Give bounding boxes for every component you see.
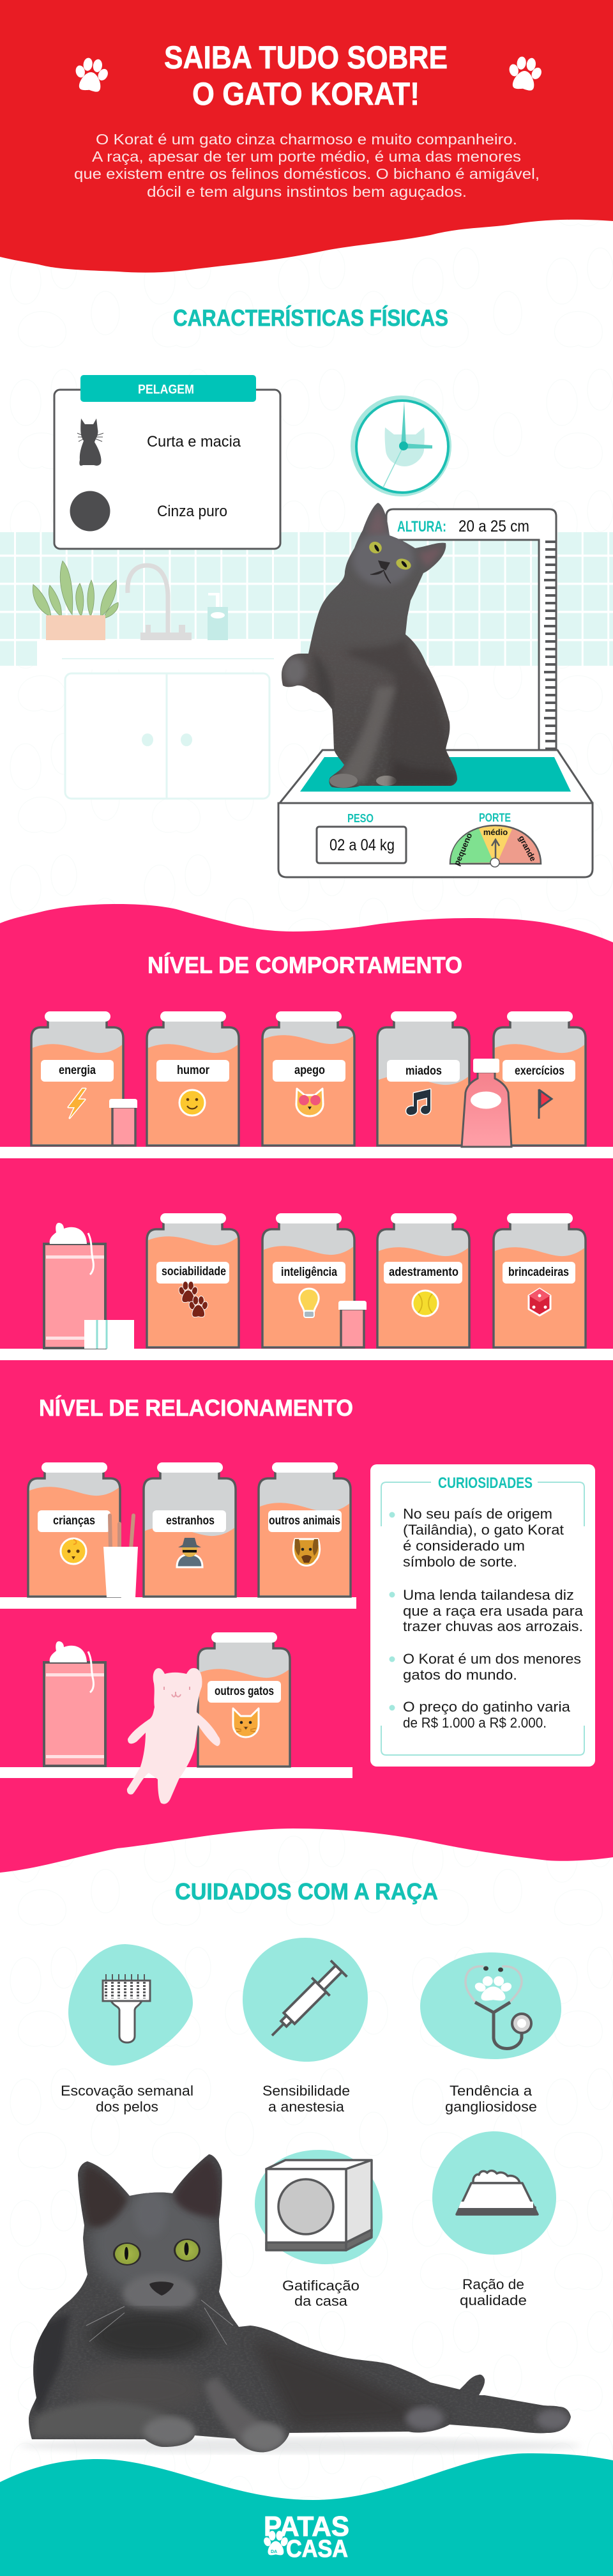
tall pink glass 2 [44,1641,105,1766]
jar: inteligência [261,1213,356,1349]
tab: pelagem [80,375,256,402]
jar: estranhos [142,1462,237,1598]
label [503,1262,575,1284]
care: gatificação [255,2150,382,2309]
text: cinza puro: Cinza puro [157,503,227,520]
peso value box: 02 a 04 kg [329,836,395,854]
soap bottle [208,593,228,640]
porte label: PORTE [479,811,511,824]
ear inner right [419,547,441,566]
nose and mouth [370,561,391,583]
intro text: dócil e tem alguns instintos bem aguçados. [147,183,467,200]
title: SAIBA TUDO SOBRE [164,40,448,75]
label [41,1060,114,1082]
label [273,1262,345,1284]
fact 4: de R$ 1.000 a R$ 2.000. [403,1715,547,1731]
peso value box [317,827,406,863]
text [282,2278,359,2309]
label: estranhos [166,1514,215,1528]
text [445,2083,537,2115]
blob [432,2131,556,2255]
icon: syringe [263,1959,348,2044]
icon: spy [177,1538,202,1567]
fact 3: gatos do mundo. [403,1667,517,1683]
cabinet knobs [142,733,192,746]
icon: light bulb [299,1289,319,1317]
forehead [139,2193,162,2207]
care: escovação [61,1944,193,2115]
text: Sensibilidade [262,2083,350,2099]
label [156,1060,229,1082]
eyes [113,2239,201,2266]
plant [33,561,118,640]
care: ração [432,2131,556,2308]
icon: dice [529,1289,550,1315]
small pink jar [109,1099,137,1146]
label: inteligência [281,1266,337,1279]
jar: outros animais [257,1462,352,1598]
text [262,2083,350,2115]
porte gauge [450,825,541,867]
text: curta e macia: Curta e macia [147,433,241,450]
ear inner left [368,511,386,533]
scale front [278,803,593,877]
label: energia [59,1064,96,1077]
tall pink glass [44,1223,105,1348]
fact 1 [403,1506,564,1570]
heading: nível de comportamento: NÍVEL DE COMPORTAMENTO [148,952,462,978]
jar: miados [376,1011,471,1147]
header panel [0,0,613,273]
teddy bear [127,1668,220,1804]
fact 1: símbolo de sorte. [403,1554,517,1570]
front legs [32,2402,195,2437]
fact 1: No seu país de origem [403,1506,552,1522]
text: Gatificação [282,2278,359,2294]
panel title: CURIOSIDADES [438,1475,533,1492]
icon: flag [539,1089,552,1119]
shelf 1 [0,1147,613,1158]
jar: apego [261,1011,356,1147]
text: da casa [294,2293,348,2309]
icon: wall clock [351,395,451,496]
fact 2: Uma lenda tailandesa diz [403,1587,574,1603]
label [268,1510,342,1532]
fact 1: (Tailândia), o gato Korat [403,1522,564,1538]
porte gauge: médio [483,827,508,837]
eyes [367,540,412,572]
label: crianças [53,1514,95,1528]
photo: sitting korat cat [282,503,457,788]
hind paw [405,2407,444,2430]
photo: lying korat cat [29,2154,571,2452]
blob [420,1952,561,2059]
shelf 3 [0,1597,356,1609]
head highlight [352,532,414,586]
icon: heart-eyes cat [296,1089,323,1116]
mouse toy 2 [50,1641,93,1692]
cabinet [65,673,269,799]
label: brincadeiras [508,1266,569,1279]
pink bottle [462,1059,511,1147]
jar: outros gatos [197,1632,291,1768]
kitchen scene [0,532,613,799]
fact 2 [403,1587,584,1634]
icon: tennis ball [412,1291,438,1316]
label: outros gatos [215,1685,274,1698]
back body shading [33,2313,70,2415]
fact 1: é considerado um [403,1538,525,1554]
icon: music note [406,1089,430,1115]
fact 3: O Korat é um dos menores [403,1651,581,1667]
jar: humor [146,1011,240,1147]
heading: cuidados com a raça: CUIDADOS COM A RAÇA [175,1878,438,1905]
logo: PATAS [264,2511,349,2542]
chest [84,2364,195,2408]
care: anestesia [243,1938,368,2115]
logo [262,2511,349,2563]
label [273,1060,345,1082]
fact 2: que a raça era usada para [403,1603,584,1619]
text: Tendência a [450,2083,533,2099]
fact 2: trazer chuvas aos arrozais. [403,1618,583,1634]
jar: energia [30,1011,125,1147]
scale platform [280,750,593,803]
dark chest [89,2311,211,2359]
faucet [128,565,192,640]
label: outros animais [269,1514,340,1528]
teal plate [300,757,571,792]
logo: CASA [286,2536,348,2563]
shelf 2 [0,1349,613,1360]
care: ganglio [420,1952,561,2115]
inner frame [381,1482,584,1755]
icon: left paw [72,56,111,93]
section: pink [0,904,613,1873]
icon: cat silhouette [77,418,103,466]
label [384,1262,462,1284]
text: dos pelos [96,2099,158,2115]
teal wave [0,2453,613,2576]
intro text: A raça, apesar de ter um porte médio, é uma das menores [92,148,521,165]
altura value: 20 a 25 cm [458,518,529,535]
jar: adestramento [376,1213,471,1349]
icon: lightning [68,1089,86,1118]
altura label: ALTURA: [397,518,446,535]
icon: paw prints [178,1282,208,1317]
peso label: PESO [347,812,374,825]
text: Escovação semanal [61,2083,193,2099]
text [61,2083,193,2115]
floor shadow [19,2438,581,2453]
icon: brush [103,1974,150,2043]
icon: stethoscope [465,1966,531,2048]
title [164,40,448,112]
panel: pelagem [54,375,280,549]
mouse toy [50,1223,93,1275]
icon: cat face [233,1708,259,1737]
label: apego [294,1064,325,1077]
height ruler panel [386,509,556,770]
icon: baby [61,1538,86,1564]
title: O GATO KORAT! [192,76,420,112]
shelf 4 [0,1767,352,1778]
label: sociabilidade [162,1265,226,1278]
cup with sticks [103,1515,138,1597]
text: a anestesia [268,2099,345,2115]
label [153,1510,226,1532]
jar: crianças [27,1462,121,1598]
text [460,2276,527,2308]
small pink jar 2 [338,1301,367,1347]
tiled wall [0,532,613,666]
label [156,1262,229,1284]
heading: nível de relacionamento: NÍVEL DE RELACIONAMENTO [39,1395,353,1421]
footer [0,2453,613,2576]
icon: smile [179,1090,205,1116]
ears [82,2166,128,2227]
label [38,1510,110,1532]
blob [255,2150,382,2264]
text: qualidade [460,2292,527,2308]
intro text: que existem entre os felinos domésticos. O bichano é amigável, [74,165,540,182]
napkin box [84,1320,134,1349]
color swatch [70,491,110,532]
intro text: O Korat é um gato cinza charmoso e muito companheiro. [96,131,517,148]
text: Ração de [462,2276,524,2292]
ruler ticks [544,540,556,765]
label [208,1681,281,1703]
body shading [351,641,450,769]
label [503,1060,575,1082]
label: adestramento [389,1266,458,1279]
jar: exercícios [492,1011,587,1147]
porte gauge: grande [517,834,538,863]
jar: brincadeiras [492,1213,587,1349]
blob [68,1944,193,2066]
icon: dog [293,1539,320,1565]
scale [278,750,593,877]
head [89,2190,217,2295]
paws [329,774,358,788]
whiskers [86,2300,233,2345]
red wave background [0,0,613,273]
label: humor [177,1064,210,1077]
label: miados [405,1064,442,1078]
icon: right paw [505,55,545,92]
fact 4 [403,1699,571,1731]
fact 3 [403,1651,581,1683]
label: exercícios [515,1064,564,1078]
fact 4: O preço do gatinho varia [403,1699,571,1715]
tab text: PELAGEM [138,383,194,397]
intro text [74,131,540,200]
porte gauge: pequeno [451,831,474,867]
panel: curiosidades [370,1464,595,1767]
jar: sociabilidade [146,1213,240,1349]
logo: DA [271,2550,277,2554]
heading: características físicas: CARACTERÍSTICAS FÍSICAS [173,305,448,331]
icon: cat house [266,2160,372,2250]
bullets [390,1512,395,1711]
icon: food bowl [457,2171,538,2214]
nose [149,2281,174,2296]
text: gangliosidose [445,2099,537,2115]
blob [243,1938,368,2062]
counter [37,640,301,670]
label [387,1060,460,1082]
